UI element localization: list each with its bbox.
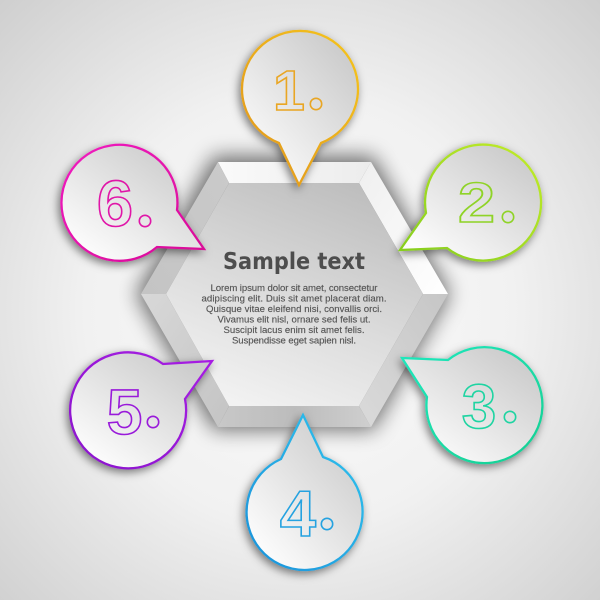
bubble 2 [400,145,541,261]
bubble 1 [242,31,358,185]
bubble 6: 6 [97,167,133,240]
bubble 6 [61,145,204,261]
bubble 5: 5 [107,376,142,448]
heading: Sample text [223,249,365,275]
central bevelled hexagon [141,162,448,427]
body text: adipiscing elit. Duis sit amet placerat diam. [202,294,386,304]
bubble 2: 2 [458,171,495,235]
body text: Suscipit lacus enim sit amet felis. [224,325,364,336]
bubble 5 [70,352,212,468]
bubble 3 [402,347,542,463]
body text: Quisque vitae eleifend nisi, convallis orci. [206,304,382,315]
body text [202,283,386,346]
bubble 4 [247,415,363,570]
hexagon shadow [136,156,450,430]
body text: Suspendisse eget sapien nisl. [232,336,356,346]
body text: Vivamus elit nisl, ornare sed felis ut. [218,314,370,326]
body text: Lorem ipsum dolor sit amet, consectetur [210,283,378,294]
bubble 3: 3 [462,373,496,442]
bubble 4: 4 [280,477,316,550]
bubble 1: 1 [273,59,305,123]
